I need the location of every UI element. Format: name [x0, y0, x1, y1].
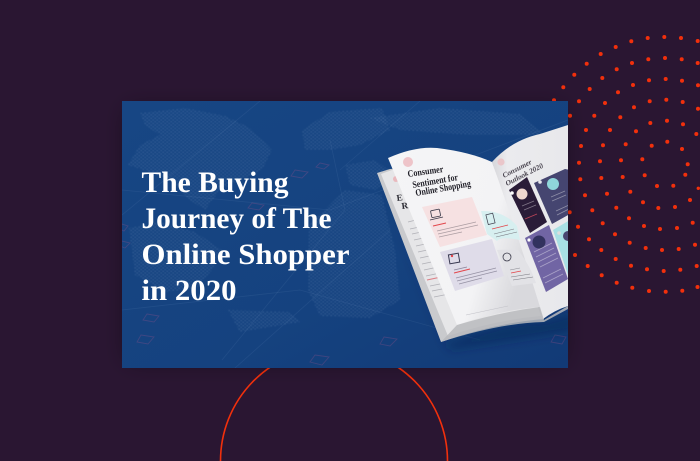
title: Journey of The — [142, 203, 332, 235]
page stack edge at spine — [441, 306, 568, 342]
dark purple card — [509, 177, 547, 233]
right page — [492, 125, 573, 319]
page heading: Consumer — [407, 164, 445, 180]
right page logo — [497, 158, 505, 166]
red circle outline — [220, 347, 448, 461]
right page heading: Outlook 2020 — [504, 161, 545, 188]
page heading: Online Shopping — [415, 178, 472, 199]
open book — [377, 125, 575, 350]
title — [142, 167, 350, 307]
world map dots — [128, 108, 545, 332]
purple card — [525, 225, 568, 292]
grey curved panel — [498, 250, 533, 285]
title: The Buying — [142, 167, 289, 199]
underlying left page text: E — [396, 192, 403, 203]
navy card — [534, 169, 570, 224]
faint network lines — [122, 101, 568, 368]
card icons — [510, 178, 573, 248]
red dotted circle decoration — [552, 35, 700, 294]
title: in 2020 — [142, 275, 236, 307]
pink panel — [422, 197, 487, 247]
page heading — [408, 168, 472, 196]
page logo — [403, 157, 413, 167]
right page heading: Consumer — [501, 157, 533, 180]
underlying left page text: R — [401, 200, 409, 211]
teal curved panel — [481, 211, 520, 241]
underlying left page text — [393, 176, 449, 297]
teal card — [553, 221, 568, 275]
title: Online Shopper — [142, 239, 350, 271]
page footer line — [466, 306, 508, 315]
page heading: Sentiment for — [412, 172, 459, 191]
front left page — [388, 148, 540, 325]
lavender panel — [440, 239, 504, 291]
card text lines — [522, 191, 569, 283]
book shadow — [446, 316, 568, 350]
infographic canvas — [122, 35, 700, 461]
map location diamonds — [120, 163, 566, 365]
card drop shadow — [128, 110, 562, 360]
back cover and left page stack — [377, 162, 544, 342]
banner card — [120, 101, 575, 368]
